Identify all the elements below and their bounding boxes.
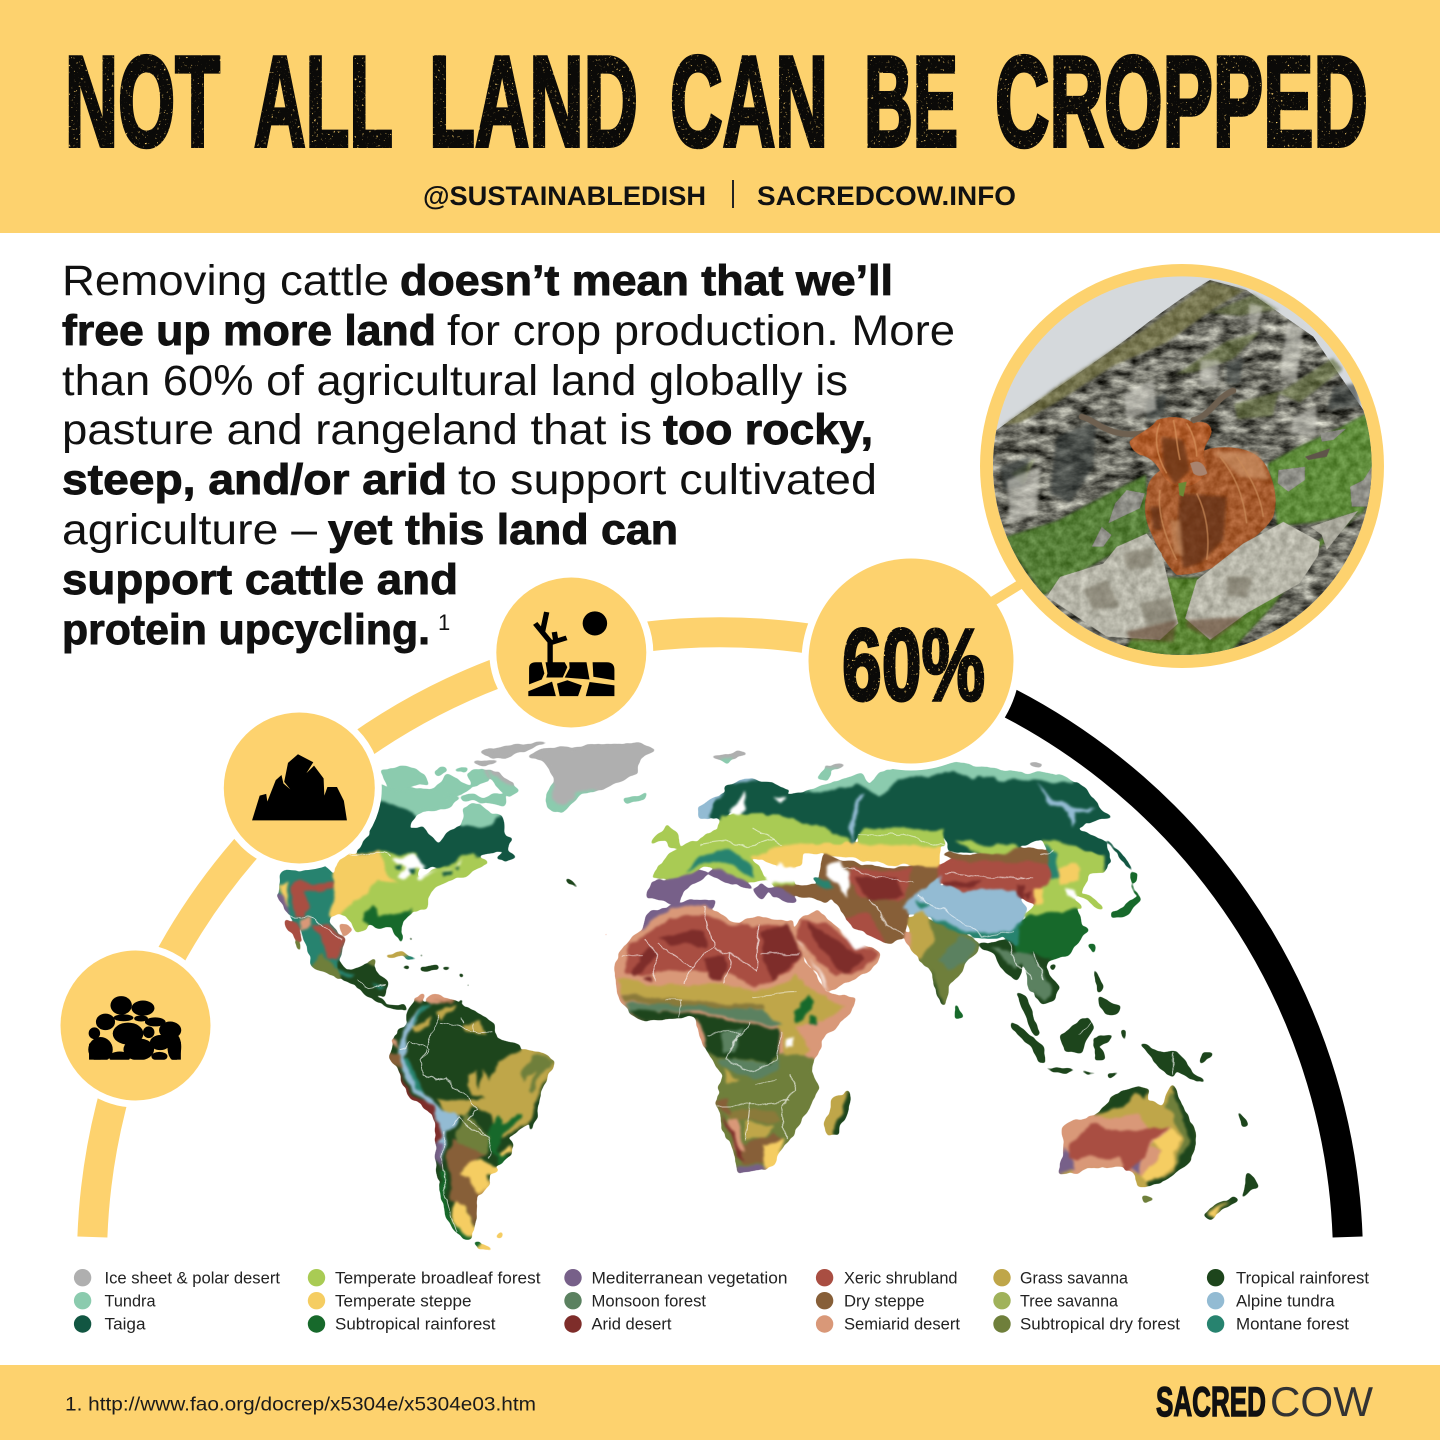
title: BE [864,30,958,174]
map: Europe, Asia, Africa, Australia [604,753,1259,1217]
intro text block: yet this land can [328,506,678,554]
legend: column 6: Tropical rainforest [1236,1270,1369,1288]
cow head [1129,417,1212,487]
map: Americas and Greenland [277,743,656,1248]
legend: column 2: Temperate steppe [335,1292,472,1310]
legend: column 2: Temperate broadleaf forest [335,1270,541,1288]
legend: column 3 [564,1269,788,1334]
legend: column 3: Mediterranean vegetation [592,1270,788,1288]
map: coloured biomes [277,743,1259,1248]
legend: column 4: Xeric shrubland [844,1270,958,1288]
cow body [1145,447,1276,575]
intro text block [62,257,955,654]
intro text block: 1 [438,610,450,635]
icon circle: rocky ground [60,950,210,1100]
intro text block: pasture and rangeland that is [62,406,652,454]
header band [0,0,1440,233]
arc: black section [960,680,1348,1237]
legend: column 6: Alpine tundra [1236,1292,1335,1310]
large boulders [1047,511,1358,640]
photo: highland cow on rocky hillside [980,260,1390,670]
stat circle: 60%: 60% [842,608,985,722]
intro text block: free up more land [62,307,436,355]
title: LAND [429,30,638,174]
legend: column 1: Ice sheet & polar desert [104,1270,280,1288]
legend: column 2 [308,1269,541,1334]
legend: column 4: Dry steppe [844,1292,924,1310]
legend: column 1 [74,1269,280,1334]
social handle and website [423,180,1016,211]
intro text block: agriculture – [62,506,317,554]
arc: yellow section [92,632,911,1237]
legend: column 5: Subtropical dry forest [1020,1316,1180,1334]
intro text block: than 60% of agricultural land globally is [62,357,848,405]
intro text block: Removing cattle [62,257,389,305]
title: CAN [670,30,828,174]
footer band [0,1365,1440,1440]
title: NOT [65,30,220,174]
map: country borders [287,827,1172,1230]
legend: column 1: Tundra [104,1292,156,1310]
footnote source link: 1. http://www.fao.org/docrep/x5304e/x5304e03.htm [65,1394,536,1416]
intro text block: protein upcycling. [62,606,430,654]
title: ALL [254,30,393,174]
world biome map [277,743,1259,1248]
legend: column 6: Montane forest [1236,1316,1349,1334]
intro text block: support cattle and [62,556,458,604]
stat circle: 60% [808,558,1014,764]
intro text block: doesn’t mean that we’ll [400,257,893,305]
legend: column 4 [816,1269,960,1334]
icon circle: arid cracked soil [496,578,646,728]
Sacred Cow logo: SACRED [1156,1378,1266,1425]
legend: column 4: Semiarid desert [844,1316,960,1334]
legend: column 5 [993,1269,1180,1334]
intro text block: to support cultivated [458,456,877,504]
legend: column 3: Monsoon forest [592,1292,706,1310]
grass slopes [1003,407,1377,657]
intro text block: steep, and/or arid [62,456,447,504]
legend: column 1: Taiga [104,1316,146,1334]
legend: column 2: Subtropical rainforest [335,1316,496,1334]
legend: column 5: Grass savanna [1020,1270,1129,1288]
icon circle: steep mountain [224,712,375,864]
legend [74,1269,1369,1334]
legend: column 6 [1207,1269,1369,1334]
intro text block: for crop production. More [447,307,955,355]
intro text block: too rocky, [663,406,873,454]
cow horns [1082,391,1233,434]
social handle and website: @SUSTAINABLEDISH [423,181,706,211]
title [65,30,1368,174]
legend: column 5: Tree savanna [1020,1292,1119,1310]
legend: column 3: Arid desert [592,1316,672,1334]
rock face [993,280,1372,655]
sky [993,276,1372,655]
social handle and website: SACREDCOW.INFO [757,181,1016,211]
small boulders [1092,428,1372,547]
Sacred Cow logo: COW [1270,1378,1373,1425]
connector from 60% circle to photo [990,582,1024,603]
